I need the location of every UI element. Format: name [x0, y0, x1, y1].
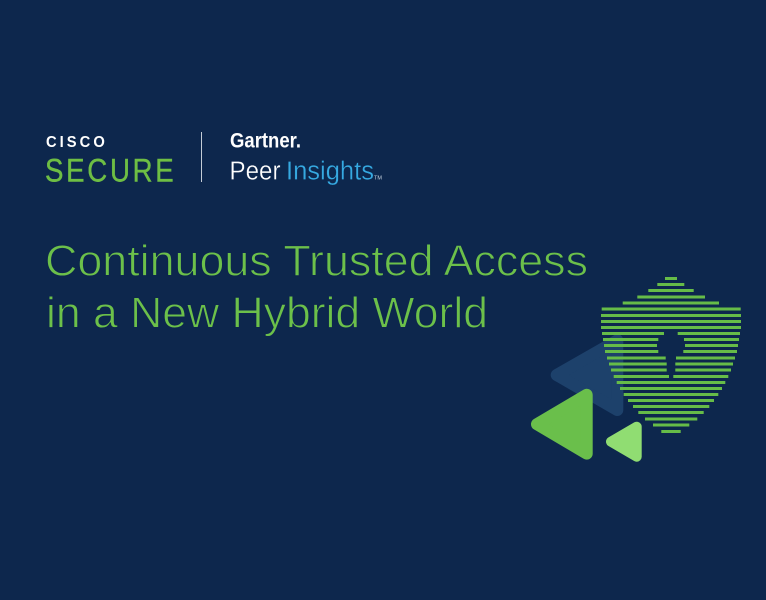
Insights wordmark: Insights	[286, 158, 374, 186]
title line 2: in a New Hybrid World	[46, 290, 488, 338]
title	[45, 238, 588, 338]
Cisco wordmark: CISCO	[46, 134, 108, 151]
logo divider	[201, 132, 202, 182]
logo: Gartner Peer Insights	[230, 130, 382, 186]
icon: blue triangle	[557, 340, 617, 410]
Secure wordmark: SECURE	[45, 153, 176, 189]
Gartner wordmark: Gartner.	[230, 130, 301, 152]
title line 1: Continuous Trusted Access	[45, 238, 588, 286]
trademark: TM	[374, 176, 382, 182]
icon: striped shield with keyhole	[601, 277, 741, 433]
icon: large green triangle	[537, 395, 587, 454]
Peer wordmark: Peer	[230, 158, 281, 186]
icon: small light green triangle	[611, 427, 637, 457]
logo: Cisco Secure	[45, 134, 176, 189]
